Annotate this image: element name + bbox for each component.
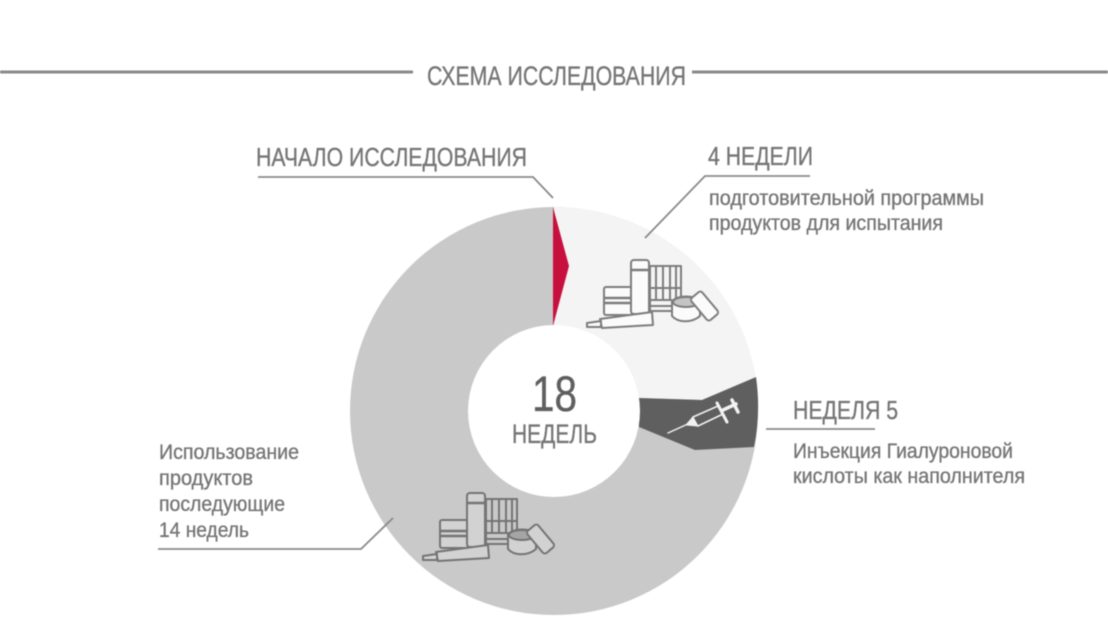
segment: product use 14 weeks xyxy=(350,207,758,615)
callout: 4 weeks: 4 НЕДЕЛИ xyxy=(708,141,813,171)
center hole xyxy=(468,325,640,497)
callout: week 5 xyxy=(766,395,1025,488)
callout: 4 weeks xyxy=(645,141,984,238)
center value: 18 xyxy=(532,366,577,422)
callout: week 5: кислоты как наполнителя xyxy=(793,465,1025,488)
center value xyxy=(512,366,597,449)
callout: product use: последующие xyxy=(159,493,285,516)
callout: product use: Использование xyxy=(159,441,299,464)
title: СХЕМА ИССЛЕДОВАНИЯ xyxy=(427,61,686,91)
icon: cosmetics products lower xyxy=(423,493,555,561)
donut chart xyxy=(350,207,758,615)
callout: 4 weeks: подготовительной программы xyxy=(709,187,984,210)
segment: study start marker xyxy=(553,207,569,326)
callout: week 5: НЕДЕЛЯ 5 xyxy=(793,395,898,425)
icon: syringe xyxy=(668,400,738,433)
icon: cosmetics products upper xyxy=(587,260,719,328)
callout: product use: 14 недель xyxy=(159,519,249,542)
callout: 4 weeks: продуктов для испытания xyxy=(709,212,943,235)
center value: НЕДЕЛЬ xyxy=(512,419,597,449)
callout: product use xyxy=(158,441,393,549)
segment: 4 week preparation xyxy=(554,207,756,400)
segment: week 5 injection xyxy=(639,377,758,450)
callout: product use: продуктов xyxy=(159,467,253,490)
callout: week 5: Инъекция Гиалуроновой xyxy=(793,440,1013,463)
callout: study start xyxy=(256,142,553,198)
callout: study start: НАЧАЛО ИССЛЕДОВАНИЯ xyxy=(256,142,527,172)
